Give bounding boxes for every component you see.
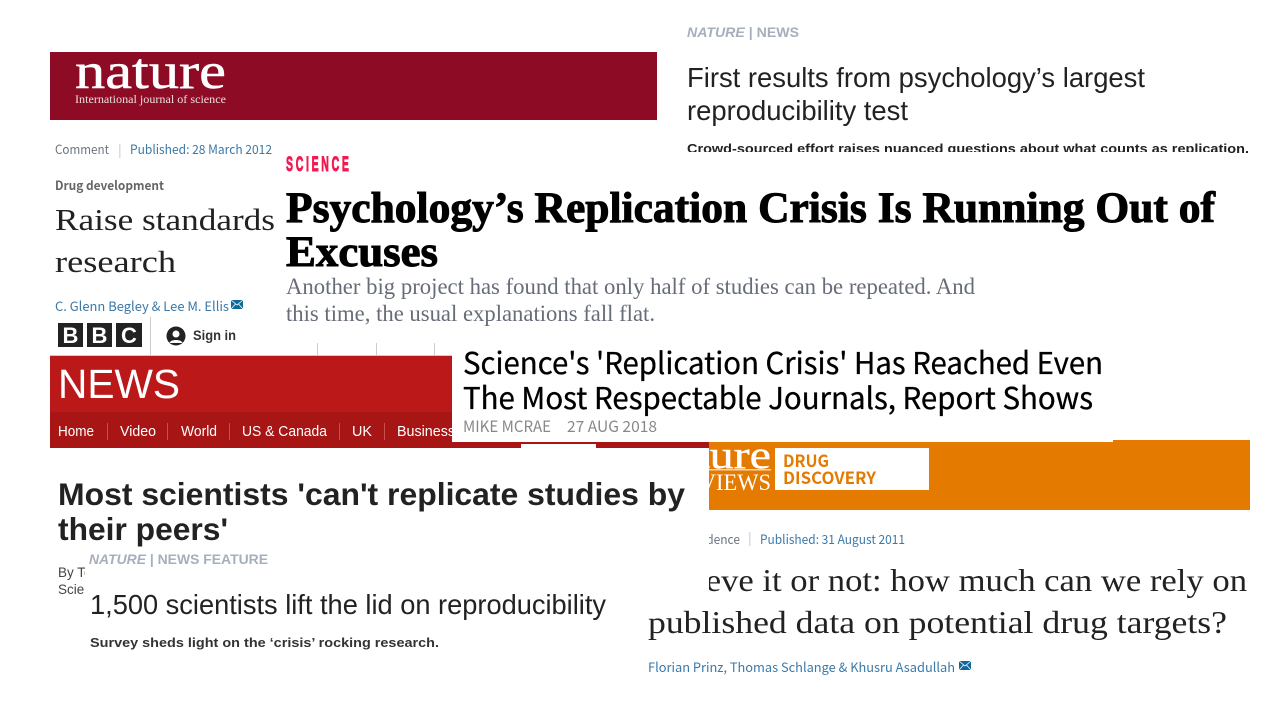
panel: Nature news feature clipping (1,500 scientists) — [85, 547, 645, 662]
banner: News: NEWS — [58, 361, 180, 407]
byline: By Tom Feilden — [58, 565, 151, 580]
banner: News — [50, 356, 709, 412]
heading: running out of excuses — [286, 185, 1216, 276]
heading: running out of excuses: Psychology’s Replication Crisis Is Running Out of — [286, 185, 1216, 232]
heading: believe it or not: published data on potential drug targets? — [648, 604, 1227, 640]
banner: Nature Reviews Drug Discovery — [709, 440, 1250, 510]
banner: Nature masthead: International journal of science — [75, 94, 226, 106]
logo: BBC: C — [121, 323, 137, 348]
navigation bar: World — [181, 424, 217, 440]
navigation bar: Home — [58, 424, 94, 440]
navigation bar: Video — [120, 424, 156, 440]
authors: C. Glenn Begley & Lee M. Ellis — [55, 296, 229, 315]
byline and date: 27 AUG 2018 — [567, 415, 657, 437]
logo: BBC — [58, 323, 142, 348]
banner: Nature Reviews Drug Discovery: REVIEWS — [671, 470, 771, 496]
heading: raise standards: Raise standards — [55, 202, 275, 237]
subhead: crowd-sourced: Crowd-sourced effort raises nuanced questions about what counts as replication. — [687, 141, 1249, 156]
icon: envelope — [959, 661, 971, 670]
navigation bar — [50, 412, 709, 448]
label: Nature News: NATURE | NEWS — [687, 24, 799, 40]
heading: raise standards — [55, 202, 275, 279]
banner: Nature masthead: nature — [75, 44, 226, 100]
meta: comment date — [55, 139, 272, 158]
label: drug development: Drug development — [55, 175, 165, 194]
panel: The Atlantic Science clipping — [280, 152, 1228, 343]
banner: Nature Reviews Drug Discovery: DISCOVERY — [783, 464, 876, 489]
label: Science: SCIENCE — [286, 152, 352, 176]
meta: comment date: Published: 28 March 2012 — [130, 139, 272, 158]
navigation bar: UK — [352, 424, 372, 440]
panel: ScienceAlert clipping — [452, 339, 1113, 442]
heading: most respectable journals — [463, 339, 1103, 418]
panel: Nature comment clipping (raise standards) — [50, 44, 657, 315]
meta: correspondence date: Correspondence — [648, 529, 740, 548]
authors: Florian Prinz, Thomas Schlange & Khusru Asadullah — [648, 657, 955, 676]
subhead: half of studies — [286, 274, 975, 326]
subhead: half of studies: this time, the usual explanations fall flat. — [286, 301, 655, 326]
heading: raise standards: research — [55, 244, 177, 279]
meta: correspondence date: Published: 31 August 2011 — [760, 529, 905, 548]
label: Nature News Feature: NATURE | NEWS FEATURE — [89, 551, 268, 567]
heading: running out of excuses: Excuses — [286, 229, 438, 276]
panel: Nature news clipping (first results) — [687, 24, 1249, 156]
subhead: survey: Survey sheds light on the ‘crisis’ rocking research. — [90, 635, 439, 650]
heading: can't replicate — [58, 476, 685, 547]
byline and date — [463, 415, 657, 437]
heading: most respectable journals: Science's 'Replication Crisis' Has Reached Even — [463, 339, 1103, 383]
heading: first results — [687, 62, 1145, 126]
heading: 1,500 scientists: 1,500 scientists lift the lid on reproducibility — [90, 589, 606, 620]
byline: Science correspondent — [58, 582, 196, 597]
meta: comment date: Comment — [55, 139, 109, 158]
icon: envelope — [231, 300, 243, 309]
banner: Nature masthead — [50, 44, 657, 120]
heading: first results: First results from psychology’s largest — [687, 62, 1145, 93]
panel: BBC News clipping — [50, 317, 710, 597]
panel: Nature Reviews article clipping — [648, 529, 1247, 676]
heading: believe it or not — [648, 562, 1247, 640]
heading: can't replicate: their peers' — [58, 511, 228, 547]
icon: account — [166, 326, 186, 346]
banner: Nature Reviews Drug Discovery: nature — [651, 434, 771, 477]
meta: correspondence date — [648, 529, 905, 548]
heading: can't replicate: Most scientists 'can't replicate studies by — [58, 476, 685, 512]
heading: most respectable journals: The Most Respectable Journals, Report Shows — [463, 374, 1093, 418]
byline — [58, 565, 196, 597]
navigation bar: Business — [397, 424, 455, 440]
heading: believe it or not: Believe it or not: how much can we rely on — [648, 562, 1247, 598]
logo: BBC: B — [63, 323, 78, 348]
logo: BBC: B — [92, 323, 107, 348]
banner: Nature Reviews Drug Discovery: DRUG — [783, 447, 829, 472]
link: sign in: Sign in — [193, 328, 236, 343]
heading: first results: reproducibility test — [687, 95, 908, 126]
subhead: half of studies: Another big project has found that only half of studies can be repeated. And — [286, 274, 975, 299]
byline and date: MIKE MCRAE — [463, 415, 551, 437]
navigation bar: US & Canada — [242, 424, 328, 440]
